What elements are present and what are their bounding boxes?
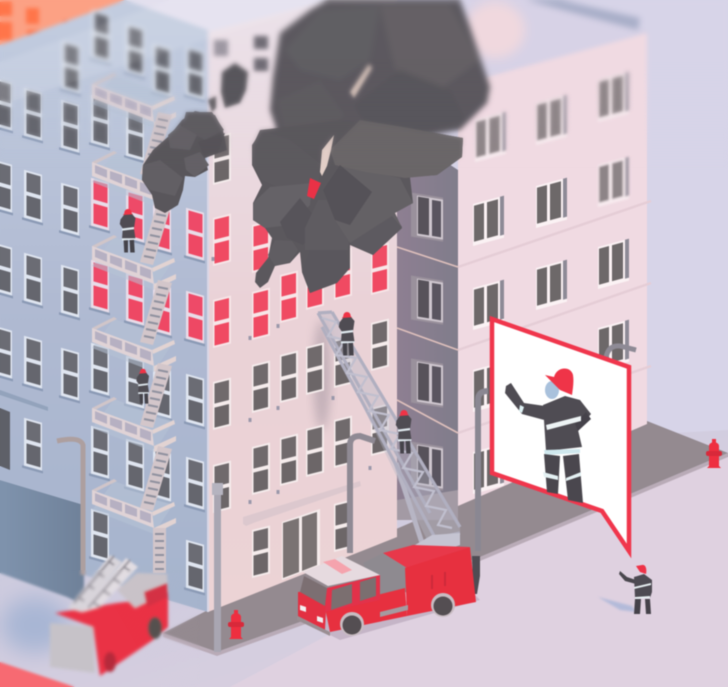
lamp at callout bbox=[478, 391, 488, 551]
blue face windows bbox=[0, 9, 205, 596]
window tick marks bbox=[213, 257, 370, 504]
headlights bbox=[300, 605, 323, 623]
body bbox=[55, 597, 168, 676]
door canopy bbox=[243, 481, 361, 526]
pink right face bbox=[208, 0, 397, 612]
corner highlight bbox=[207, 30, 209, 612]
cab front bbox=[298, 590, 327, 630]
top depth-of-field blur bbox=[0, 0, 646, 156]
plinth bbox=[397, 490, 458, 520]
front windows bbox=[473, 72, 629, 494]
rear box top bbox=[383, 545, 470, 568]
box slots bbox=[432, 572, 445, 589]
grey mid box bbox=[363, 553, 407, 596]
lamp on pink wall bbox=[350, 436, 375, 553]
sidewalk bbox=[163, 421, 728, 652]
legs bbox=[544, 454, 583, 503]
torso bbox=[543, 396, 591, 451]
sidewalk edge bbox=[163, 453, 728, 656]
lamp corner bbox=[212, 483, 223, 652]
far lamp arm bbox=[606, 346, 636, 358]
cab windows bbox=[331, 577, 376, 610]
roof light bbox=[323, 559, 352, 574]
firefighter on street bbox=[598, 565, 652, 614]
smoke plume bbox=[142, 0, 490, 293]
firefighter mid ladder bbox=[396, 410, 412, 454]
sleeve band bbox=[519, 405, 524, 413]
street lamps bbox=[57, 346, 636, 652]
rear box side bbox=[405, 547, 476, 616]
helmet bbox=[545, 368, 573, 395]
ground floor shop window bbox=[0, 408, 10, 470]
lamp left bbox=[57, 439, 83, 575]
legs bbox=[634, 599, 651, 614]
ladders bbox=[140, 112, 172, 511]
hydrant right bbox=[706, 439, 722, 468]
lower smoke lumps bbox=[252, 130, 322, 188]
fire escape bbox=[92, 73, 176, 573]
helmet bbox=[636, 565, 646, 574]
firefighter climbing escape bbox=[136, 369, 149, 404]
folded ladder bbox=[68, 555, 138, 612]
main building bbox=[0, 0, 397, 612]
flame glimpse bbox=[307, 178, 321, 199]
small smoke cluster bbox=[142, 63, 248, 213]
bottom vertical ladder bbox=[153, 528, 166, 573]
left ledge bbox=[0, 390, 48, 411]
cab top bbox=[117, 573, 168, 608]
firefighter portrait bbox=[505, 368, 591, 503]
ladder truss bbox=[318, 312, 460, 540]
bottom-left coral strip bbox=[0, 662, 75, 687]
hand on hip bbox=[575, 412, 591, 431]
shadow bbox=[300, 590, 480, 640]
lower smoke silhouette bbox=[252, 120, 463, 293]
orange corner block bbox=[0, 0, 170, 62]
fire engine bbox=[297, 545, 480, 640]
top translucent wash bbox=[0, 0, 330, 105]
arm bbox=[619, 571, 636, 584]
cab roof bbox=[303, 556, 380, 586]
blue truck shadow on ground bbox=[1, 597, 69, 653]
ledges bbox=[458, 201, 651, 433]
shadow bbox=[598, 597, 636, 612]
wheels bbox=[148, 617, 162, 639]
roof bbox=[458, 0, 648, 88]
speech bubble bbox=[492, 319, 629, 551]
hydrant on sidewalk bbox=[228, 610, 244, 639]
ground plane bbox=[0, 430, 728, 687]
roof parapet bbox=[525, 0, 640, 30]
turntable bbox=[415, 533, 460, 552]
raised arm bbox=[505, 383, 548, 421]
upper smoke bbox=[270, 0, 490, 155]
stripes bbox=[634, 583, 651, 599]
right building bbox=[397, 0, 651, 520]
knee bands bbox=[543, 472, 581, 481]
firefighter top of ladder bbox=[339, 312, 354, 356]
side step bbox=[380, 605, 408, 617]
side windows bbox=[411, 193, 443, 491]
waist stripe bbox=[546, 416, 581, 430]
cab side bbox=[325, 588, 407, 632]
wheels bbox=[340, 593, 455, 636]
roof edge bbox=[125, 0, 340, 35]
dark side face bbox=[397, 130, 458, 510]
firefighter behind truck bbox=[472, 556, 480, 594]
gap: wall sliver lower bbox=[320, 135, 334, 176]
face bbox=[545, 381, 559, 399]
roof pink patch bbox=[465, 2, 525, 58]
rear panel bbox=[50, 623, 95, 673]
bumper bbox=[297, 616, 330, 636]
gap: wall sliver upper bbox=[350, 64, 372, 98]
hem stripe bbox=[544, 449, 580, 455]
cab side upper bbox=[325, 575, 380, 612]
double door bbox=[282, 509, 320, 580]
windshield bbox=[300, 576, 327, 606]
rear fire engine bbox=[50, 555, 168, 676]
aerial ladder bbox=[318, 312, 460, 552]
pink face windows bbox=[213, 36, 389, 580]
front face bbox=[458, 33, 647, 506]
firefighter on fire escape bbox=[120, 209, 136, 252]
courtyard pavement bbox=[0, 480, 84, 605]
callout panel bbox=[492, 319, 629, 551]
blue left face bbox=[0, 0, 208, 612]
bottom left depth-of-field blur bbox=[0, 570, 172, 687]
support arm bbox=[396, 463, 423, 546]
ground lower right bbox=[230, 456, 728, 687]
body bbox=[634, 574, 652, 598]
soot stain bbox=[313, 320, 331, 430]
cab window bbox=[144, 583, 168, 607]
